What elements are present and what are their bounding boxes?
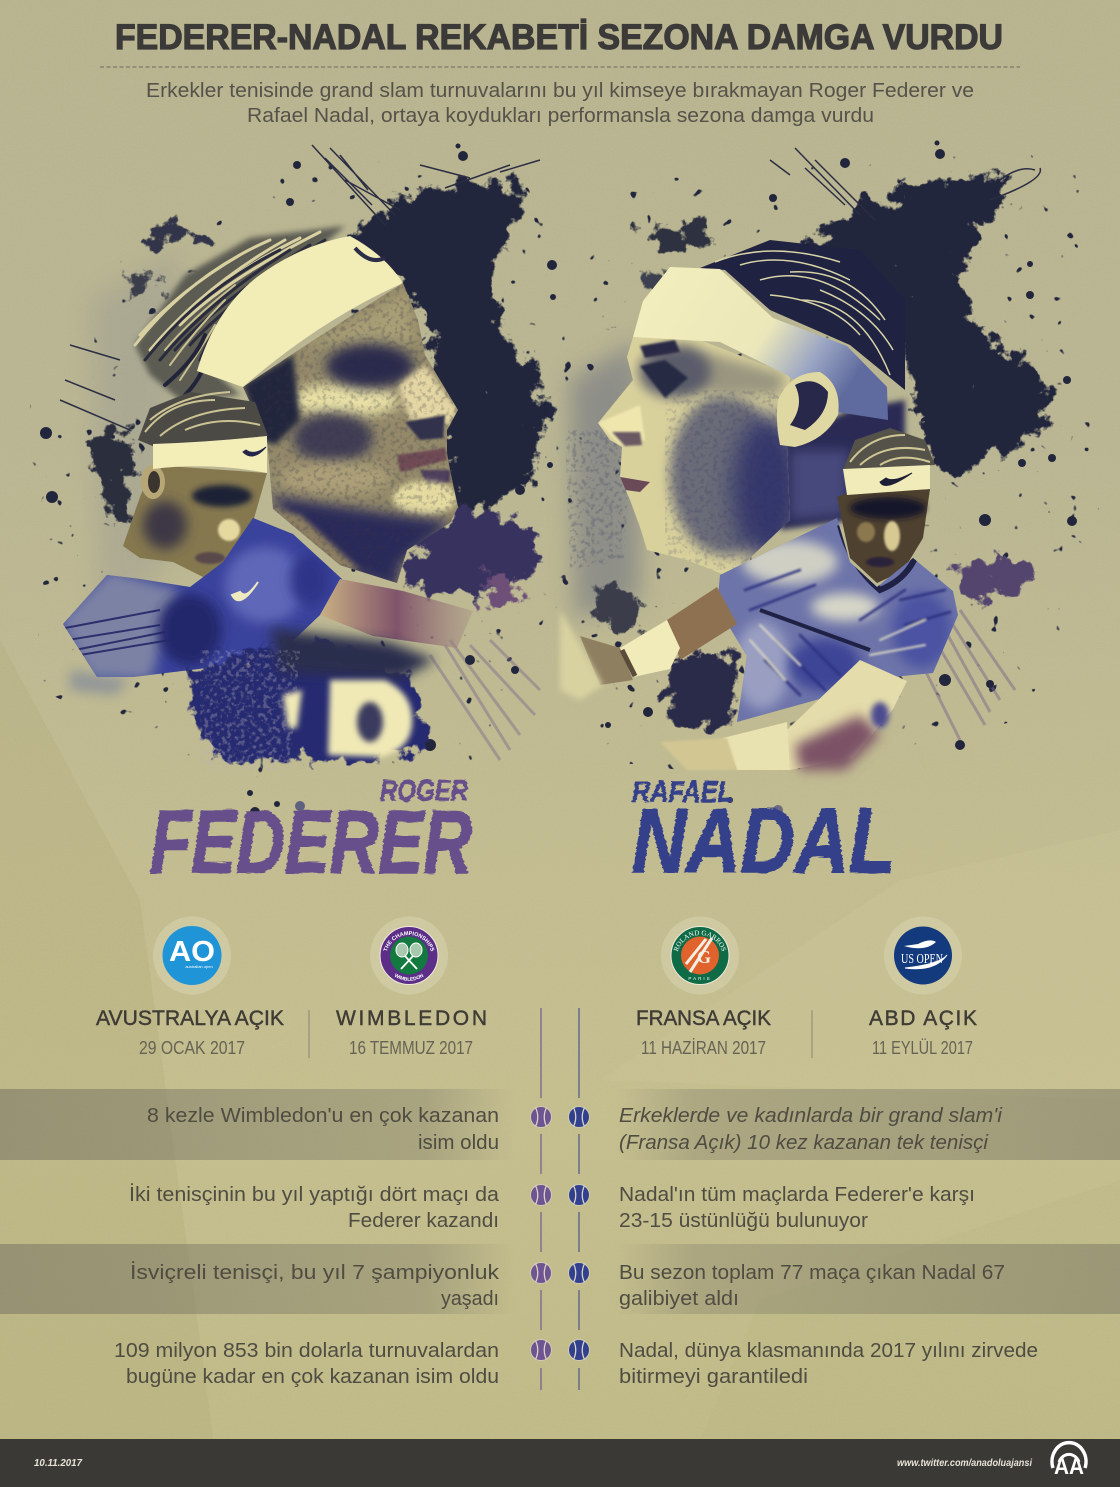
icon: Roland Garros logo: PARIS — [688, 976, 712, 981]
ink splatter behind Nadal — [560, 140, 1100, 815]
name: Roger Federer: FEDERER — [150, 793, 472, 893]
subtitle: Rafael Nadal, ortaya koydukları performansla sezona damga vurdu — [247, 105, 874, 127]
facts: Federer: 109 milyon 853 bin dolarla turnuvalardan — [114, 1340, 499, 1362]
icon: Wimbledon logo: THE CHAMPIONSHIPS — [383, 931, 434, 952]
icon: Anadolu Agency logo: AA — [1054, 1453, 1084, 1479]
shirt and sleeve — [60, 518, 342, 680]
icon: Australian Open logo: AO — [169, 936, 215, 968]
facts: Nadal — [619, 1105, 1038, 1388]
Nadal shirt — [717, 518, 958, 722]
tournament: Fransa Açık — [636, 1007, 771, 1058]
facts: Nadal: Bu sezon toplam 77 maça çıkan Nadal 67 — [619, 1262, 1005, 1284]
large Nadal: ear — [777, 372, 839, 447]
facts: Nadal: bitirmeyi garantiledi — [619, 1366, 808, 1388]
ink splatter behind Federer — [30, 140, 570, 817]
icon: Wimbledon logo — [370, 916, 448, 994]
facts: Nadal: 23-15 üstünlüğü bulunuyor — [619, 1210, 868, 1232]
footer: 10.11.2017 — [34, 1457, 83, 1469]
facts: Nadal: Nadal, dünya klasmanında 2017 yılını zirvede — [619, 1340, 1038, 1362]
name: Rafael Nadal: RAFAEL — [632, 774, 733, 809]
tournament: Fransa Açık: FRANSA AÇIK — [636, 1007, 771, 1030]
large Federer: face — [240, 280, 465, 590]
large Nadal: hair — [700, 240, 905, 390]
large Nadal: headband — [633, 267, 888, 420]
tournament: ABD Açık — [869, 1007, 977, 1058]
facts: Nadal: Nadal'ın tüm maçlarda Federer'e karşı — [619, 1184, 975, 1206]
icon: Roland Garros logo — [661, 916, 739, 994]
subtitle: Erkekler tenisinde grand slam turnuvalarını bu yıl kimseye bırakmayan Roger Federer ve — [146, 80, 974, 102]
icon: US Open logo — [884, 916, 962, 994]
tournament: Wimbledon: 16 TEMMUZ 2017 — [349, 1038, 473, 1058]
tournament: Fransa Açık: 11 HAZİRAN 2017 — [641, 1038, 766, 1058]
icon: Australian Open logo — [153, 916, 231, 994]
footer — [0, 1439, 1120, 1487]
icon: Wimbledon logo: WIMBLEDON — [394, 973, 424, 981]
name: Roger Federer: ROGER — [380, 773, 468, 808]
name: Roger Federer — [150, 773, 472, 893]
small Federer: face — [123, 465, 267, 579]
tournament: ABD Açık: 11 EYLÜL 2017 — [872, 1038, 973, 1058]
lower body ink and shirt lettering — [70, 628, 435, 770]
tournament: ABD Açık: ABD AÇIK — [869, 1007, 977, 1030]
small Nadal: hair — [843, 428, 935, 470]
illustration: Roger Federer portraits — [30, 140, 570, 817]
tournament: Wimbledon — [336, 1007, 487, 1058]
facts: Federer: Federer kazandı — [348, 1210, 499, 1232]
icon: Anadolu Agency logo — [1052, 1443, 1086, 1479]
tournament: Avustralya Açık: AVUSTRALYA AÇIK — [96, 1007, 284, 1030]
title: FEDERER-NADAL REKABETİ SEZONA DAMGA VURDU — [115, 18, 1003, 57]
tournament: Wimbledon: WIMBLEDON — [336, 1007, 487, 1030]
Federer forearm — [320, 579, 473, 648]
large Nadal: neck shadow — [780, 400, 905, 530]
tournament: Avustralya Açık: 29 OCAK 2017 — [139, 1038, 245, 1058]
small Nadal: face — [837, 489, 930, 583]
facts: Federer: bugüne kadar en çok kazanan isim oldu — [126, 1366, 499, 1388]
Nadal lower arm — [660, 660, 907, 770]
large Federer: hair — [135, 226, 345, 400]
facts: Federer: İki tenisçinin bu yıl yaptığı dört maçı da — [129, 1183, 500, 1206]
facts: Federer: İsviçreli tenisçi, bu yıl 7 şampiyonluk — [130, 1261, 500, 1284]
illustration: Rafael Nadal portraits — [560, 140, 1100, 815]
facts: Nadal: Erkeklerde ve kadınlarda bir grand slam'i — [619, 1105, 1003, 1127]
large Nadal: face — [598, 337, 808, 577]
facts: Federer — [114, 1105, 500, 1388]
name: Rafael Nadal: NADAL — [632, 790, 895, 892]
timeline: Nadal navy column — [568, 1008, 590, 1390]
facts: Federer: isim oldu — [418, 1132, 499, 1154]
icon: US Open logo: US OPEN — [901, 951, 943, 966]
footer: www.twitter.com/anadoluajansi — [897, 1457, 1033, 1469]
tournament: Avustralya Açık — [96, 1007, 284, 1058]
small Federer: hair — [138, 392, 268, 447]
icon: Roland Garros logo: G — [697, 947, 711, 967]
facts: Federer: yaşadı — [441, 1288, 499, 1310]
small Nadal: headband — [843, 465, 930, 495]
large Federer: headband — [197, 236, 403, 387]
icon: Australian Open logo: australian open — [185, 964, 213, 969]
facts: Nadal: galibiyet aldı — [619, 1288, 739, 1310]
icon: Roland Garros logo: ROLAND GARROS — [674, 930, 726, 952]
subtitle — [146, 80, 974, 127]
facts: Nadal: (Fransa Açık) 10 kez kazanan tek tenisçi — [619, 1132, 989, 1154]
facts: Federer: 8 kezle Wimbledon'u en çok kazanan — [147, 1105, 499, 1127]
timeline: Federer purple column — [530, 1008, 552, 1390]
Nadal forearm, wristband and hand — [560, 587, 740, 735]
small Federer: headband — [153, 436, 267, 473]
